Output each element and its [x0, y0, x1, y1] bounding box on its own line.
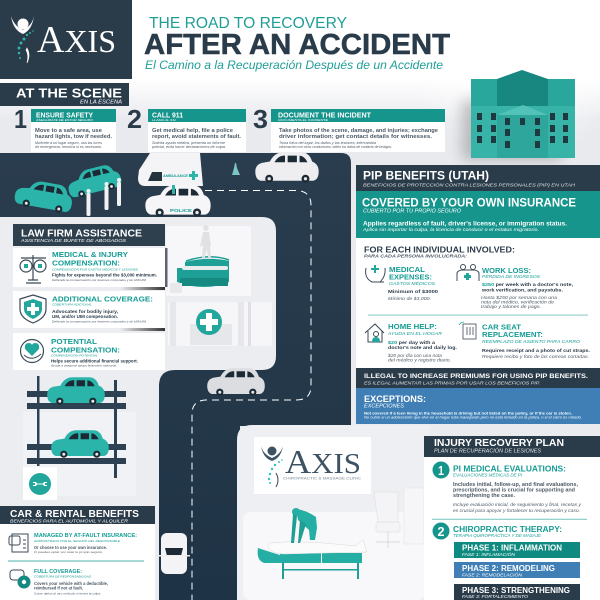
item: medical expenses: Mínimo de $3,000.	[388, 296, 431, 301]
hospital block	[166, 225, 272, 346]
step: pi medical evaluations: 1	[438, 463, 444, 478]
injury recovery heading: INJURY RECOVERY PLAN	[434, 437, 564, 449]
clinic sign: CHIROPRACTIC & MASSAGE CLINIC	[283, 476, 362, 480]
step 2: call 911: LLAMA AL 911	[152, 118, 176, 122]
item: car seat replacement	[482, 322, 590, 359]
step: pi medical evaluations: Includes initial, follow-up, and final evaluations,	[453, 482, 579, 488]
title: El Camino a la Recuperación Después de un Accidente	[145, 58, 443, 72]
card: potential compensation: COMPENSACIÓN POTENCIAL	[51, 352, 98, 358]
exceptions banner: Not covered if a teen living in the household is driving but not listed on the policy, or if the car is stolen.	[364, 412, 572, 416]
step: pi medical evaluations: Incluye evaluación inicial, de seguimiento y final, recetas y	[453, 502, 582, 507]
exceptions banner: No cubre si un adolescente que vive en el hogar está manejando pero no está incluido en la póliza, o si el carro es robado.	[364, 416, 582, 420]
icon: medical hands	[366, 265, 385, 282]
injury recovery heading: PLAN DE RECUPERACIÓN DE LESIONES	[434, 448, 542, 454]
card: additional coverage: Defiende la compensación por lesiones corporales y de UM/UIM	[52, 320, 147, 324]
treatment room floor	[243, 512, 425, 600]
phase 2: PHASE 2: REMODELING	[462, 564, 555, 573]
phase 3: FASE 3: FORTALECIMIENTO	[462, 594, 529, 599]
step 1: ensure safety: hazard lights, tow if needed.	[35, 134, 112, 140]
logo wordmark: AXIS	[37, 19, 116, 61]
pip heading	[356, 165, 600, 191]
ambulance	[138, 153, 203, 186]
step 1: ensure safety	[14, 104, 116, 152]
icon: workers	[457, 264, 479, 281]
phase 3: PHASE 3: STRENGTHENING	[462, 586, 570, 595]
teal crashed cars	[13, 162, 123, 215]
item: home help: del médico y registro diario.	[388, 358, 451, 362]
heading: at the scene	[0, 83, 129, 106]
covered by your own insurance	[356, 191, 600, 238]
ambulance: AMBULANCE	[163, 174, 188, 178]
item: home help: AYUDA EN EL HOGAR	[387, 331, 443, 336]
card: additional coverage: UM, and/or UIM compensation.	[52, 314, 118, 319]
item: home help: $20 per day with a	[388, 340, 435, 346]
card: medical and injury compensation: MEDICAL & INJURY	[52, 250, 128, 259]
law firm heading	[13, 224, 165, 246]
step: chiropractic therapy: TERAPIA QUIROPRÁCTICA Y DE MASAJE	[453, 533, 541, 538]
panel: injury recovery plan	[424, 436, 600, 600]
heading: at the scene: AT THE SCENE	[16, 86, 122, 100]
item: home help: $20 por día con una nota	[387, 353, 443, 358]
step 2: call 911: policial, evita hacer declaraciones de culpa.	[151, 145, 226, 149]
item: work loss: trabajo y talones de pago.	[481, 304, 541, 309]
item: car seat replacement: Requiere recibo y foto de las correas cortadas.	[482, 354, 589, 359]
card: medical and injury compensation: Fights for expenses beyond the $3,000 minimum.	[52, 272, 157, 278]
people at the scene	[86, 178, 121, 216]
phase 1: PHASE 1: INFLAMMATION	[462, 544, 562, 552]
step 1: ensure safety: ENSURE SAFETY	[36, 112, 93, 120]
phase 3	[454, 584, 580, 600]
item: work loss	[481, 266, 574, 309]
item: full coverage: reimbursed if not at fault.	[34, 586, 83, 590]
item: medical expenses: Minimum of $3000	[388, 289, 438, 295]
card: potential compensation: Ayuda a asegurar apoyo financiero adicional.	[50, 364, 117, 368]
step: pi medical evaluations: prescriptions, and is crucial for supporting and	[453, 488, 575, 494]
item: managed by at-fault insurance: MANAGED BY AT-FAULT INSURANCE:	[34, 533, 137, 539]
step 3: document the incident	[253, 104, 445, 152]
panel: law firm assistance	[13, 224, 168, 370]
hospital bed	[170, 257, 229, 293]
step: pi medical evaluations: PI MEDICAL EVALUATIONS:	[453, 464, 566, 474]
car and rental heading: BENEFICIOS PARA EL AUTOMÓVIL Y ALQUILER	[10, 518, 129, 524]
step 1: ensure safety: 1	[14, 104, 27, 134]
icon: traffic cone	[232, 163, 240, 175]
item: full coverage	[34, 569, 108, 596]
for each individual involved: FOR EACH INDIVIDUAL INVOLVED:	[364, 246, 515, 254]
step 2: call 911: Get medical help, file a police	[152, 128, 233, 134]
icon: car seat receipt	[459, 322, 476, 339]
card: medical and injury compensation	[13, 248, 165, 287]
injury recovery heading	[424, 436, 600, 457]
covered by your own insurance: Aplica sin importar la culpa, la licencia de conducir o el estatus migratorio.	[362, 227, 539, 232]
item: full coverage: Covers your vehicle with a deductible,	[34, 581, 108, 586]
step: chiropractic therapy: 2	[438, 524, 444, 539]
step: pi medical evaluations: EVALUACIONES MÉDICAS DE PI	[453, 472, 523, 478]
pip heading: PIP BENEFITS (UTAH)	[363, 170, 489, 182]
icon: logo figure	[11, 16, 34, 63]
card: potential compensation: COMPENSATION:	[51, 346, 120, 354]
step 3: document the incident: Take photos of the scene, damage, and injuries; exchange	[279, 128, 438, 134]
card: additional coverage: Advocates for bodily injury,	[52, 309, 118, 314]
step 3: document the incident: Toma fotos del lugar, los daños y las lesiones; intercambia	[279, 141, 376, 145]
pip heading: BENEFICIOS DE PROTECCIÓN CONTRA LESIONES PERSONALES (PIP) EN UTAH	[363, 182, 576, 188]
heading: at the scene: EN LA ESCENA	[80, 100, 123, 106]
office chair	[374, 492, 400, 548]
illegal premiums banner: ES ILEGAL AUMENTAR LAS PRIMAS POR USAR LOS BENEFICIOS PIP.	[364, 380, 540, 386]
step: pi medical evaluations: strengthening the case.	[453, 493, 516, 499]
doctor figure	[200, 225, 211, 259]
item: home help: HOME HELP:	[388, 322, 437, 331]
covered by your own insurance: COVERED BY YOUR OWN INSURANCE	[362, 198, 576, 210]
item: car seat replacement: Requires receipt and a photo of cut straps.	[482, 348, 590, 353]
item: work loss: WORK LOSS:	[482, 266, 531, 275]
law firm heading: ASISTENCIA DE BUFETE DE ABOGADOS	[20, 238, 126, 243]
step: pi medical evaluations: es crucial para apoyar y fortalecer tu recuperación y caso.	[453, 508, 580, 513]
office desk	[404, 488, 424, 544]
step 3: document the incident: DOCUMENTA EL INCIDENTE	[278, 118, 329, 122]
item: medical expenses: EXPENSES:	[389, 272, 432, 282]
icon: shield	[20, 295, 46, 323]
step 2: call 911: Solicita ayuda médica, presenta un informe	[152, 141, 225, 145]
item: home help	[387, 322, 457, 362]
item: managed by at-fault insurance: ADMINISTRADO POR EL SEGURO DEL RESPONSABLE	[33, 539, 121, 543]
item: car seat replacement: CAR SEAT	[482, 322, 521, 332]
gray car at hospital	[207, 368, 265, 396]
title	[144, 15, 451, 72]
card: potential compensation	[13, 333, 165, 370]
phase 1: FASE 1: INFLAMACIÓN	[462, 552, 516, 557]
item: home help: doctor's note and daily log.	[388, 345, 457, 351]
card: additional coverage: COBERTURA ADICIONAL	[52, 302, 92, 306]
item: medical expenses	[388, 265, 438, 301]
icon: car with gear	[10, 570, 30, 588]
step 2: call 911: report, avoid statements of fault.	[152, 134, 241, 140]
item: work loss: $250 per week with a doctor's note,	[482, 282, 574, 288]
white car on road	[255, 152, 319, 183]
step 1: ensure safety: Muévete a un lugar seguro, usa las luces	[35, 141, 102, 145]
panel: pip benefits	[356, 165, 600, 424]
illegal premiums banner: ILLEGAL TO INCREASE PREMIUMS FOR USING PIP BENEFITS.	[364, 373, 588, 380]
clinic sign	[254, 437, 371, 494]
step: chiropractic therapy: CHIROPRACTIC THERAPY:	[453, 525, 562, 534]
exceptions banner: EXCEPTIONS:	[364, 394, 426, 404]
item: full coverage: Cubre daños al otro vehículo si tienes la culpa.	[34, 592, 101, 596]
item: work loss: work verification, and paystubs.	[481, 288, 563, 294]
card: medical and injury compensation: COMPENSATION:	[52, 258, 120, 268]
icon: home helper	[365, 324, 384, 342]
police car: POLICE	[170, 208, 193, 214]
illegal premiums banner	[356, 368, 600, 388]
logo panel	[0, 0, 132, 79]
item: car seat replacement: REPLACEMENT:	[482, 330, 543, 339]
for each individual involved: PARA CADA PERSONA INVOLUCRADA:	[364, 254, 468, 258]
phase 2	[454, 562, 580, 578]
step 3: document the incident: 3	[253, 104, 268, 134]
panel: car and rental benefits	[0, 506, 155, 600]
card: medical and injury compensation: Defiende la compensación por lesiones corporales y de UM/UIM	[52, 278, 147, 282]
car and rental heading: CAR & RENTAL BENEFITS	[10, 509, 139, 520]
item: medical expenses: MEDICAL	[389, 265, 425, 274]
step 1: ensure safety: Move to a safe area, use	[35, 128, 102, 134]
step 2: call 911: 2	[127, 104, 142, 134]
step 3: document the incident: DOCUMENT THE INCIDENT	[278, 112, 372, 120]
step 3: document the incident: driver information; get contact details for witnesses.	[279, 134, 433, 140]
card: potential compensation: POTENTIAL	[51, 337, 97, 346]
item: work loss: Hasta $250 por semana con una	[481, 295, 558, 300]
item: work loss: PÉRDIDA DE INGRESOS	[482, 273, 540, 279]
card: additional coverage	[13, 291, 165, 328]
car and rental heading	[0, 506, 155, 524]
item: managed by at-fault insurance	[33, 533, 137, 554]
exceptions banner: EXCEPCIONES	[364, 404, 405, 410]
top-view white car	[158, 533, 190, 574]
law firm heading: LAW FIRM ASSISTANCE	[21, 228, 142, 240]
icon: hospital plus	[196, 309, 222, 335]
item: managed by at-fault insurance: Or choose to use your own insurance.	[34, 545, 107, 550]
step: chiropractic therapy	[432, 522, 562, 540]
icon: scales	[20, 255, 46, 283]
title: AFTER AN ACCIDENT	[144, 29, 451, 61]
step: pi medical evaluations	[432, 462, 582, 513]
item: car seat replacement: REEMPLAZO DE ASIENTO PARA CARRO	[482, 339, 581, 344]
item: work loss: nota del médico, verificación de	[481, 300, 555, 304]
phase 1	[454, 542, 580, 558]
card: potential compensation: Helps secure additional financial support.	[51, 358, 138, 364]
covered by your own insurance: CUBIERTO POR TU PROPIO SEGURO	[363, 208, 461, 214]
for each individual involved	[364, 246, 515, 258]
icon: insurance document	[9, 534, 28, 552]
item: medical expenses: GASTOS MÉDICOS	[389, 280, 436, 287]
step 3: document the incident: información con otros conductores; obtén los datos de contacto de testigos.	[279, 145, 392, 149]
step 1: ensure safety: ASEGÚRATE DE ESTAR SEGURO	[35, 117, 94, 122]
clinic block	[237, 425, 430, 600]
step 2: call 911	[127, 104, 246, 152]
item: full coverage: FULL COVERAGE:	[34, 569, 82, 575]
step 1: ensure safety: de emergencia, remolca si es necesario.	[35, 145, 102, 149]
exceptions banner	[356, 388, 600, 424]
item: full coverage: COBERTURA DE RESPONSABILIDAD	[34, 574, 92, 578]
step 2: call 911: CALL 911	[152, 112, 183, 120]
icon: heart in hand	[20, 340, 44, 362]
card: medical and injury compensation: COMPENSACIÓN POR GASTOS MÉDICOS Y LESIONES	[52, 266, 138, 272]
left city block	[0, 217, 276, 600]
icon: wrench card	[23, 467, 57, 500]
police car	[145, 185, 211, 217]
clinic sign: AXIS	[285, 444, 361, 481]
item: managed by at-fault insurance: O puedes optar por usar tu propio seguro.	[34, 550, 103, 554]
title: THE ROAD TO RECOVERY	[149, 15, 347, 32]
icon: courthouse building	[462, 70, 575, 160]
massage table and therapist	[258, 508, 367, 579]
road network	[0, 153, 351, 600]
car lift	[23, 376, 136, 496]
phase 2: FASE 2: REMODELACIÓN	[462, 572, 523, 578]
covered by your own insurance: Applies regardless of fault, driver's license, or immigration status.	[363, 220, 567, 228]
card: additional coverage: ADDITIONAL COVERAGE:	[52, 294, 153, 304]
